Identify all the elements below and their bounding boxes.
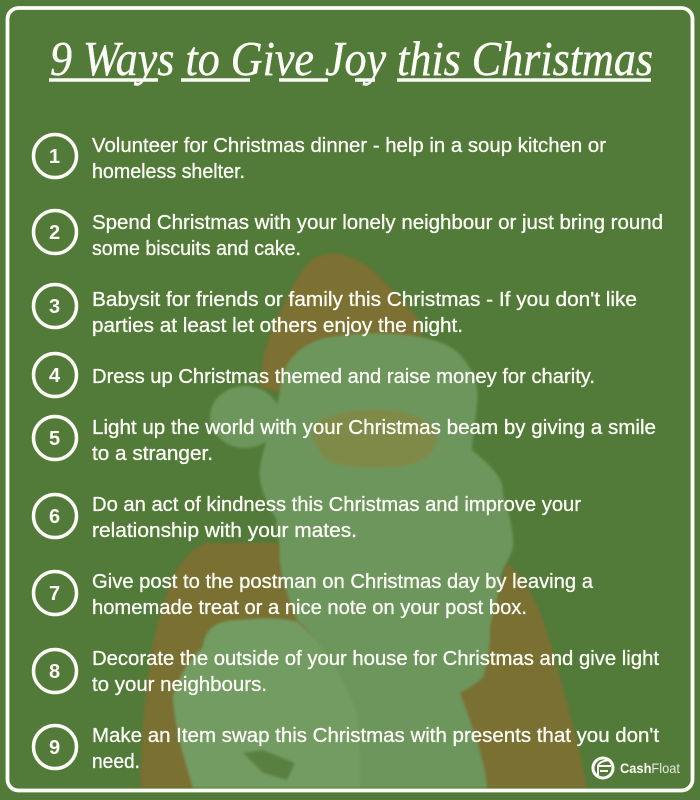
item 6: Do an act of kindness this Christmas and improve your: [92, 494, 581, 516]
item 5: to a stranger.: [92, 443, 213, 465]
item 1: [34, 134, 606, 183]
item 2: 2: [49, 222, 60, 244]
item 7: 7: [49, 583, 60, 605]
item 3: [34, 284, 637, 337]
item 4: 4: [49, 365, 61, 387]
item 4: Dress up Christmas themed and raise money for charity.: [92, 366, 595, 388]
item 6: 6: [49, 506, 60, 528]
illustration: faded Santa: [140, 254, 587, 788]
item 2: some biscuits and cake.: [92, 238, 301, 260]
item 5: Light up the world with your Christmas beam by giving a smile: [92, 417, 656, 439]
item 9: Make an Item swap this Christmas with presents that you don't: [92, 725, 659, 747]
item 9: [34, 725, 659, 773]
logo: CashFloat: CashFloat: [620, 760, 680, 776]
item 8: [34, 648, 659, 696]
item 8: 8: [49, 661, 60, 683]
item 3: Babysit for friends or family this Christmas - If you don't like: [92, 289, 637, 311]
item 9: need.: [92, 751, 140, 773]
item 6: [34, 494, 581, 542]
item 7: homemade treat or a nice note on your post box.: [92, 597, 527, 619]
item 3: parties at least let others enjoy the night.: [92, 315, 463, 337]
item 4: [34, 354, 595, 396]
item 2: [34, 210, 663, 260]
item 6: relationship with your mates.: [92, 520, 357, 542]
item 7: Give post to the postman on Christmas day by leaving a: [92, 571, 594, 593]
item 8: Decorate the outside of your house for Christmas and give light: [92, 648, 659, 670]
item 5: [34, 416, 656, 465]
item 7: [34, 571, 594, 619]
item 1: homeless shelter.: [92, 161, 245, 183]
item 8: to your neighbours.: [92, 674, 267, 696]
item 3: 3: [49, 296, 60, 318]
item 1: 1: [49, 146, 60, 168]
item 9: 9: [49, 737, 60, 759]
item 5: 5: [49, 428, 60, 450]
logo: CashFloat: [593, 758, 680, 778]
item 1: Volunteer for Christmas dinner - help in a soup kitchen or: [92, 135, 606, 157]
item 2: Spend Christmas with your lonely neighbour or just bring round: [92, 212, 663, 234]
